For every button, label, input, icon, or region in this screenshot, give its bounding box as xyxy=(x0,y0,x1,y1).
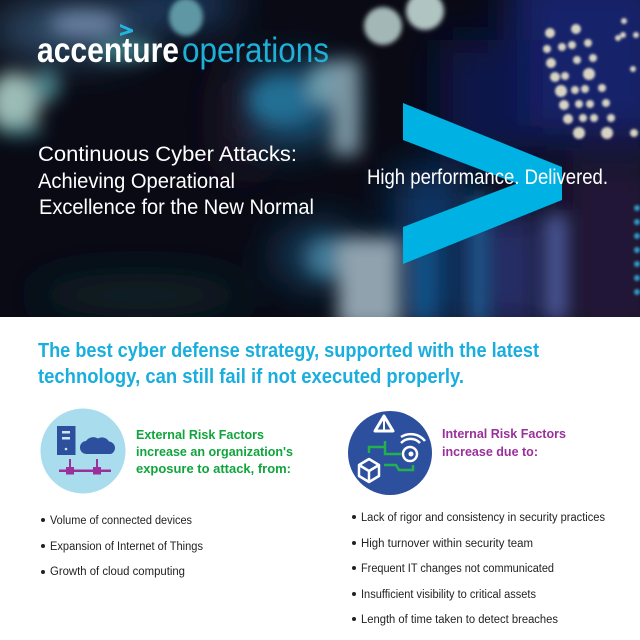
title xyxy=(38,143,314,219)
icon: large accenture chevron xyxy=(403,103,562,264)
panel: external risk factors xyxy=(40,408,293,578)
heading xyxy=(38,340,539,388)
internal risk list xyxy=(352,512,605,626)
external risk text: External Risk Factors xyxy=(136,427,264,442)
logo: accenture operations: accenture xyxy=(37,31,179,70)
heading: The best cyber defense strategy, supported with the latest xyxy=(38,340,539,362)
logo: accenture operations: operations xyxy=(182,31,329,70)
external risk text: increase an organization's xyxy=(136,444,293,459)
internal risk text xyxy=(442,426,566,459)
external risk list: Expansion of Internet of Things xyxy=(50,541,203,553)
external risk list: Volume of connected devices xyxy=(50,515,192,527)
internal risk list: Insufficient visibility to critical assets xyxy=(361,589,536,601)
icon: small logo chevron xyxy=(120,24,133,36)
icon: connected devices xyxy=(348,411,432,495)
internal risk list: Length of time taken to detect breaches xyxy=(361,614,558,626)
internal risk list: High turnover within security team xyxy=(361,538,533,550)
external risk list: Growth of cloud computing xyxy=(50,566,185,578)
logo: accenture operations xyxy=(37,24,329,70)
external risk text: exposure to attack, from: xyxy=(136,461,291,476)
title: Achieving Operational xyxy=(38,170,235,193)
internal risk text: increase due to: xyxy=(442,444,538,459)
header photo background xyxy=(0,0,640,340)
external risk text xyxy=(136,427,293,476)
internal risk text: Internal Risk Factors xyxy=(442,426,566,441)
tagline: High performance. Delivered. xyxy=(367,166,608,189)
icon: server and cloud network xyxy=(40,408,126,494)
heading: technology, can still fail if not executed properly. xyxy=(38,366,464,388)
panel: internal risk factors xyxy=(348,411,605,626)
title: Continuous Cyber Attacks: xyxy=(38,143,297,166)
internal risk list: Frequent IT changes not communicated xyxy=(361,563,554,575)
internal risk list: Lack of rigor and consistency in security practices xyxy=(361,512,605,524)
title: Excellence for the New Normal xyxy=(39,196,314,219)
external risk list xyxy=(41,515,203,578)
